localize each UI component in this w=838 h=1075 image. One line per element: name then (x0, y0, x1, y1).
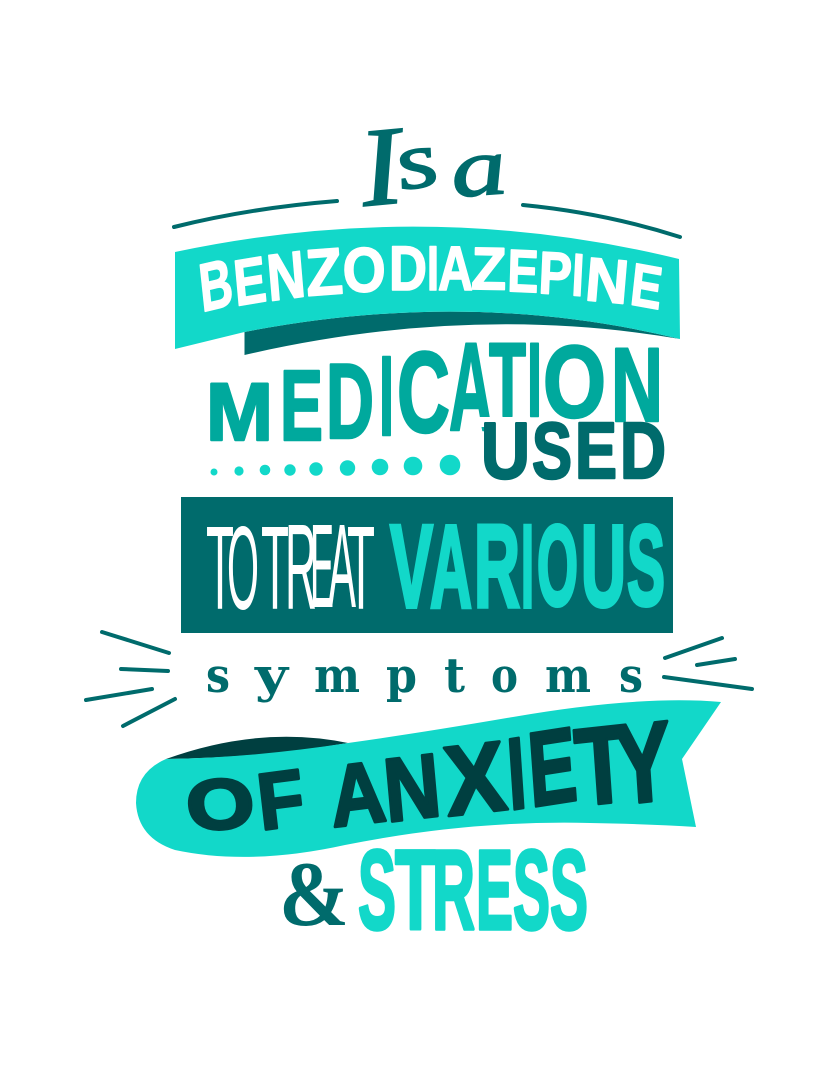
word: symptoms: s (206, 648, 230, 704)
word: BENZODIAZEPINE: D (389, 234, 427, 304)
word: VARIOUS: U (581, 501, 626, 631)
right curved line (523, 205, 680, 237)
heading: Is a: s (387, 113, 447, 208)
panel: dark rectangle (181, 497, 673, 633)
words: OF ANXIETY: X (439, 720, 511, 837)
word: BENZODIAZEPINE: E (229, 244, 269, 320)
word: MEDICATION: C (397, 329, 450, 457)
words: OF ANXIETY: T (569, 703, 634, 830)
words: OF ANXIETY: O (184, 762, 258, 847)
word: USED: U (481, 406, 530, 495)
word: BENZODIAZEPINE: N (583, 245, 632, 318)
words: TO TREAT: T (206, 502, 234, 635)
word: BENZODIAZEPINE: I (427, 234, 439, 304)
left rays (86, 632, 175, 726)
word: STRESS: T (395, 827, 436, 953)
word: STRESS: S (550, 827, 588, 953)
word: BENZODIAZEPINE: N (263, 237, 308, 315)
dotted row (210, 455, 460, 476)
words: TO TREAT: O (227, 502, 259, 635)
words: TO TREAT: E (310, 500, 334, 633)
word: USED: S (532, 406, 572, 495)
word: VARIOUS: R (474, 501, 520, 633)
word: USED: D (620, 406, 666, 495)
words: TO TREAT: A (328, 500, 356, 633)
word: symptoms: m (545, 648, 591, 704)
words: TO TREAT: T (261, 502, 289, 635)
word: STRESS: E (476, 827, 513, 953)
words: OF ANXIETY: N (379, 737, 445, 842)
words: OF ANXIETY: F (252, 753, 309, 847)
word: VARIOUS: A (430, 501, 472, 633)
word: BENZODIAZEPINE: A (438, 234, 473, 304)
heading: Is a: a (446, 119, 512, 215)
word: STRESS: R (432, 827, 475, 953)
ampersand: & (279, 843, 349, 945)
banner: anxiety (136, 700, 721, 857)
banner shadow: anxiety (166, 737, 348, 759)
word: BENZODIAZEPINE: Z (471, 235, 507, 303)
word: BENZODIAZEPINE: I (570, 241, 587, 309)
word: MEDICATION: D (326, 341, 374, 461)
banner shadow (244, 312, 680, 355)
word: symptoms: s (619, 648, 643, 704)
word: BENZODIAZEPINE: Z (303, 234, 345, 310)
word: MEDICATION: N (611, 327, 663, 444)
infographic poster: T (347, 502, 375, 635)
banner: benzodiazepine (175, 227, 680, 349)
left curved line (174, 201, 337, 227)
word: MEDICATION: I (527, 322, 542, 439)
word: STRESS: S (358, 827, 396, 953)
word: symptoms: p (386, 648, 417, 704)
words: TO TREAT: R (285, 499, 317, 635)
words: OF ANXIETY: E (521, 708, 581, 830)
infographic poster: S (627, 503, 665, 630)
word: BENZODIAZEPINE: E (507, 237, 540, 305)
word: BENZODIAZEPINE: B (192, 247, 237, 327)
word: BENZODIAZEPINE: E (627, 251, 667, 321)
word: MEDICATION: A (449, 318, 493, 457)
word: VARIOUS: O (537, 503, 578, 630)
word: MEDICATION: T (489, 322, 526, 439)
words: OF ANXIETY: I (500, 717, 530, 832)
words: OF ANXIETY: Y (608, 698, 676, 829)
word: USED: E (575, 406, 617, 495)
word: MEDICATION: E (280, 350, 323, 462)
word: symptoms: y (254, 648, 290, 704)
word: BENZODIAZEPINE: O (342, 235, 386, 306)
heading: Is a: I (353, 103, 414, 231)
word: symptoms: t (444, 648, 465, 704)
word: BENZODIAZEPINE: P (537, 239, 574, 308)
right rays (664, 638, 752, 689)
word: MEDICATION: O (543, 325, 606, 439)
words: OF ANXIETY: A (325, 744, 390, 846)
word: MEDICATION: M (206, 367, 273, 458)
word: VARIOUS: V (390, 501, 433, 633)
word: MEDICATION: I (379, 333, 394, 459)
word: STRESS: S (513, 827, 550, 953)
word: VARIOUS: I (521, 501, 534, 633)
word: symptoms: m (314, 648, 360, 704)
word: symptoms: o (491, 648, 518, 704)
